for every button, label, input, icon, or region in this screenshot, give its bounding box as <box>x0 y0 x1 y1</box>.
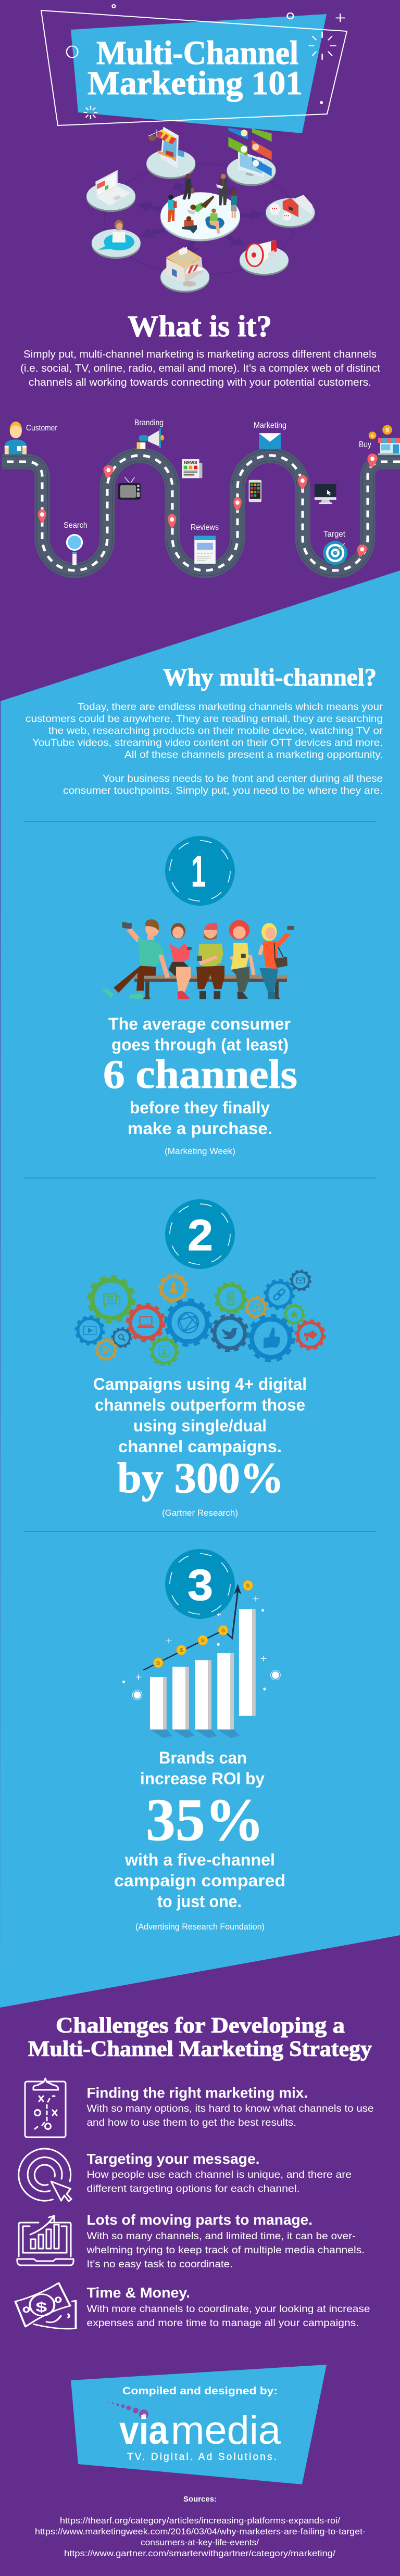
stat text 1: goes through (at least) <box>111 1035 289 1054</box>
text block: marketing mix: Finding the right marketing mix. <box>86 2085 308 2101</box>
stat text 2: channels outperform those <box>95 1395 305 1414</box>
person 1 <box>101 919 168 999</box>
text block: definition: (i.e. social, TV, online, radio, email and more). It’s a complex web of distinct <box>20 363 380 374</box>
road icons <box>5 422 400 565</box>
gear: video <box>76 1316 104 1344</box>
illustration: multi-channel hub <box>86 126 315 293</box>
sources: https://thearf.org/category/articles/increasing-platforms-expands-roi/ <box>60 2516 340 2526</box>
stat text 1: (Marketing Week) <box>165 1146 235 1156</box>
icon: newspaper: NEWS <box>184 461 197 465</box>
text block: moving parts <box>86 2212 365 2270</box>
icon: shop and coins: $ <box>371 434 374 438</box>
text block: moving parts: It’s no easy task to coordinate. <box>86 2259 233 2270</box>
icon: customer <box>5 422 27 454</box>
text block: targeting: different targeting options for each channel. <box>86 2184 300 2194</box>
title banner <box>41 5 347 133</box>
road labels: Target <box>323 530 346 539</box>
gear: thumbs up <box>248 1315 294 1361</box>
gear: phone <box>215 1283 246 1314</box>
icon: phone <box>249 480 261 502</box>
sources: Sources: <box>183 2495 217 2504</box>
stat text 3: campaign compared <box>114 1871 285 1890</box>
stat text 3: increase ROI by <box>140 1769 265 1788</box>
heading: what is it: What is it? <box>128 309 272 343</box>
text block: why: Your business needs to be front and center during all these <box>103 773 383 784</box>
gear: megaphone <box>295 1320 325 1350</box>
text block: marketing mix <box>86 2085 374 2128</box>
stat text 1 <box>103 1014 297 1156</box>
stat text 1: The average consumer <box>108 1014 291 1033</box>
text block: definition: Simply put, multi-channel marketing is marketing across different channels <box>23 349 377 360</box>
text block: why <box>26 702 383 796</box>
stat text 2: Campaigns using 4+ digital <box>93 1375 307 1393</box>
icon: review page: ★★★★★ <box>197 552 213 555</box>
logo: viamedia: media <box>171 2408 281 2453</box>
stat text 3 <box>114 1748 285 1932</box>
text block: why: the web, researching products on their mobile device, watching TV or <box>48 726 383 737</box>
road labels: Branding <box>134 418 164 427</box>
icon: monitor <box>315 484 336 504</box>
shop <box>166 247 203 287</box>
text block: targeting: Targeting your message. <box>86 2151 259 2167</box>
credit line: Compiled and designed by: <box>122 2385 278 2397</box>
stat text 2: by 300% <box>117 1454 284 1502</box>
panel: why multi-channel <box>26 664 383 796</box>
gear: laptop <box>127 1304 165 1341</box>
icon: money: $ <box>36 2300 47 2315</box>
gear: rss <box>95 1339 117 1361</box>
icon: TV <box>118 477 141 500</box>
gear: link <box>265 1280 294 1309</box>
text block: why: Today, there are endless marketing channels which means your <box>78 702 383 713</box>
text block: time and money: expenses and more time to manage all your campaigns. <box>86 2318 359 2329</box>
text block: targeting <box>86 2151 352 2194</box>
text block: marketing mix: and how to use them to get the best results. <box>86 2117 296 2128</box>
monitor with reviews <box>228 128 272 177</box>
stat text 3: Brands can <box>159 1748 247 1767</box>
panel: stat 3 <box>114 1549 285 1932</box>
person 2 <box>168 923 192 999</box>
icon: target cursor <box>19 2149 71 2201</box>
stat text 2: using single/dual <box>133 1416 267 1435</box>
icon: clipboard <box>25 2078 66 2137</box>
illustration: rising bar chart: $ <box>179 1647 183 1654</box>
gear: chat <box>89 1276 134 1322</box>
text block: moving parts: Lots of moving parts to manage. <box>86 2212 312 2228</box>
title: Multi-Channel <box>96 34 298 72</box>
stat text 2: (Gartner Research) <box>162 1508 238 1518</box>
icon: review page <box>194 536 216 564</box>
panel: stat 1 <box>101 836 297 1156</box>
icon: laptop chart <box>17 2216 73 2265</box>
gear: person <box>159 1274 188 1302</box>
stat text 2: channel campaigns. <box>118 1437 282 1456</box>
logo: viamedia: via <box>119 2408 169 2453</box>
text block: moving parts: With so many channels, and limited time, it can be over- <box>86 2231 356 2242</box>
gear: star <box>284 1304 305 1325</box>
illustration: rising bar chart: $ <box>156 1660 160 1666</box>
road labels: Marketing <box>254 421 286 430</box>
text block: definition: channels all working towards connecting with your potential customers. <box>29 377 371 388</box>
heading: challenges <box>28 2014 372 2061</box>
panel: challenges <box>15 2014 374 2329</box>
person 5 <box>259 923 294 999</box>
title <box>88 34 303 102</box>
stat text 3: with a five-channel <box>124 1850 275 1869</box>
text block: why: consumer touchpoints. Simply put, you need to be where they are. <box>63 785 383 796</box>
stat text 3: 35% <box>146 1787 264 1854</box>
person 3 <box>196 923 224 999</box>
person 4 <box>229 920 254 999</box>
heading: why multi-channel: Why multi-channel? <box>163 664 377 691</box>
icon: bullseye <box>323 541 347 565</box>
stat text 1: before they finally <box>130 1098 270 1117</box>
text block: time and money: Time & Money. <box>86 2285 190 2301</box>
sources <box>35 2495 366 2558</box>
stat text 1: 6 channels <box>103 1051 297 1097</box>
sources: https://www.gartner.com/smarterwithgartner/category/marketing/ <box>64 2548 335 2558</box>
heading: challenges: Multi-Channel Marketing Strategy <box>28 2037 372 2061</box>
text block: why: All of these channels present a marketing opportunity. <box>124 750 383 760</box>
illustration: channel gears <box>76 1270 325 1365</box>
icon: shop and coins <box>369 425 400 455</box>
gear: search <box>112 1328 131 1348</box>
icon: shop and coins: $ <box>385 428 390 433</box>
icon: envelope <box>259 433 281 449</box>
number badge 2: 2 <box>188 1211 213 1260</box>
illustration: rising bar chart: $ <box>221 1628 225 1634</box>
stat text 1: make a purchase. <box>128 1119 272 1138</box>
gear: mail <box>290 1270 311 1291</box>
text block: time and money: With more channels to coordinate, your looking at increase <box>86 2304 370 2315</box>
laptop <box>95 170 131 206</box>
icons: map pins <box>38 453 378 557</box>
number badge 3: 3 <box>188 1560 213 1609</box>
people <box>168 174 238 234</box>
gear: twitter <box>211 1315 248 1351</box>
text block: targeting: How people use each channel is unique, and there are <box>86 2169 352 2180</box>
text block: marketing mix: With so many options, its hard to know what channels to use <box>86 2103 374 2114</box>
stat text 3: (Advertising Research Foundation) <box>135 1922 265 1932</box>
road labels: Buy <box>359 440 371 449</box>
email and video <box>270 195 312 221</box>
icon: megaphone <box>137 428 164 449</box>
road labels: Search <box>64 521 88 530</box>
illustration: rising bar chart <box>122 1581 280 1738</box>
panel: blue middle section <box>0 570 400 2008</box>
panel: stat 2 <box>76 1199 325 1518</box>
number badge 2 <box>165 1199 235 1269</box>
sources: consumers-at-key-life-events/ <box>141 2537 259 2547</box>
logo: viamedia: TV. Digital. Ad Solutions. <box>127 2452 277 2463</box>
road map <box>2 455 400 570</box>
number badge 1: 1 <box>191 847 206 896</box>
icon: magnifier <box>66 534 83 565</box>
panel: what is it <box>2 309 400 570</box>
road labels: Customer <box>26 424 58 433</box>
panel: credit banner <box>71 2365 327 2484</box>
icon: newspaper <box>182 459 202 478</box>
number badge 1 <box>165 836 235 906</box>
stat text 3: to just one. <box>157 1892 242 1911</box>
illustration: rising bar chart: $ <box>201 1638 205 1644</box>
support woman <box>98 220 134 250</box>
heading: challenges: Challenges for Developing a <box>56 2014 345 2038</box>
megaphone <box>246 240 277 267</box>
title: Marketing 101 <box>88 65 303 102</box>
gear: music <box>245 1297 267 1318</box>
road labels: Reviews <box>191 523 219 532</box>
phone storefront <box>148 126 184 168</box>
text block: moving parts: whelming trying to keep track of multiple media channels. <box>86 2245 365 2256</box>
panel: header <box>41 5 347 293</box>
illustration: rising bar chart: $ <box>246 1583 250 1589</box>
text block: why: customers could be anywhere. They are reading email, they are searching <box>26 714 383 725</box>
illustration: people on bench <box>101 919 294 999</box>
sources: https://www.marketingweek.com/2016/03/04/why-marketers-are-failing-to-target- <box>35 2527 366 2536</box>
text block: why: YouTube videos, streaming video content on their OTT devices and more. <box>32 738 383 748</box>
text block: time and money <box>86 2285 370 2329</box>
gear: tablet <box>150 1337 179 1365</box>
logo: viamedia <box>108 2402 281 2463</box>
text block: definition <box>20 349 380 388</box>
stat text 2 <box>93 1375 307 1518</box>
road labels <box>26 418 371 539</box>
icon: money <box>15 2283 76 2329</box>
gear: globe <box>166 1300 211 1346</box>
number badge 3 <box>165 1549 235 1619</box>
